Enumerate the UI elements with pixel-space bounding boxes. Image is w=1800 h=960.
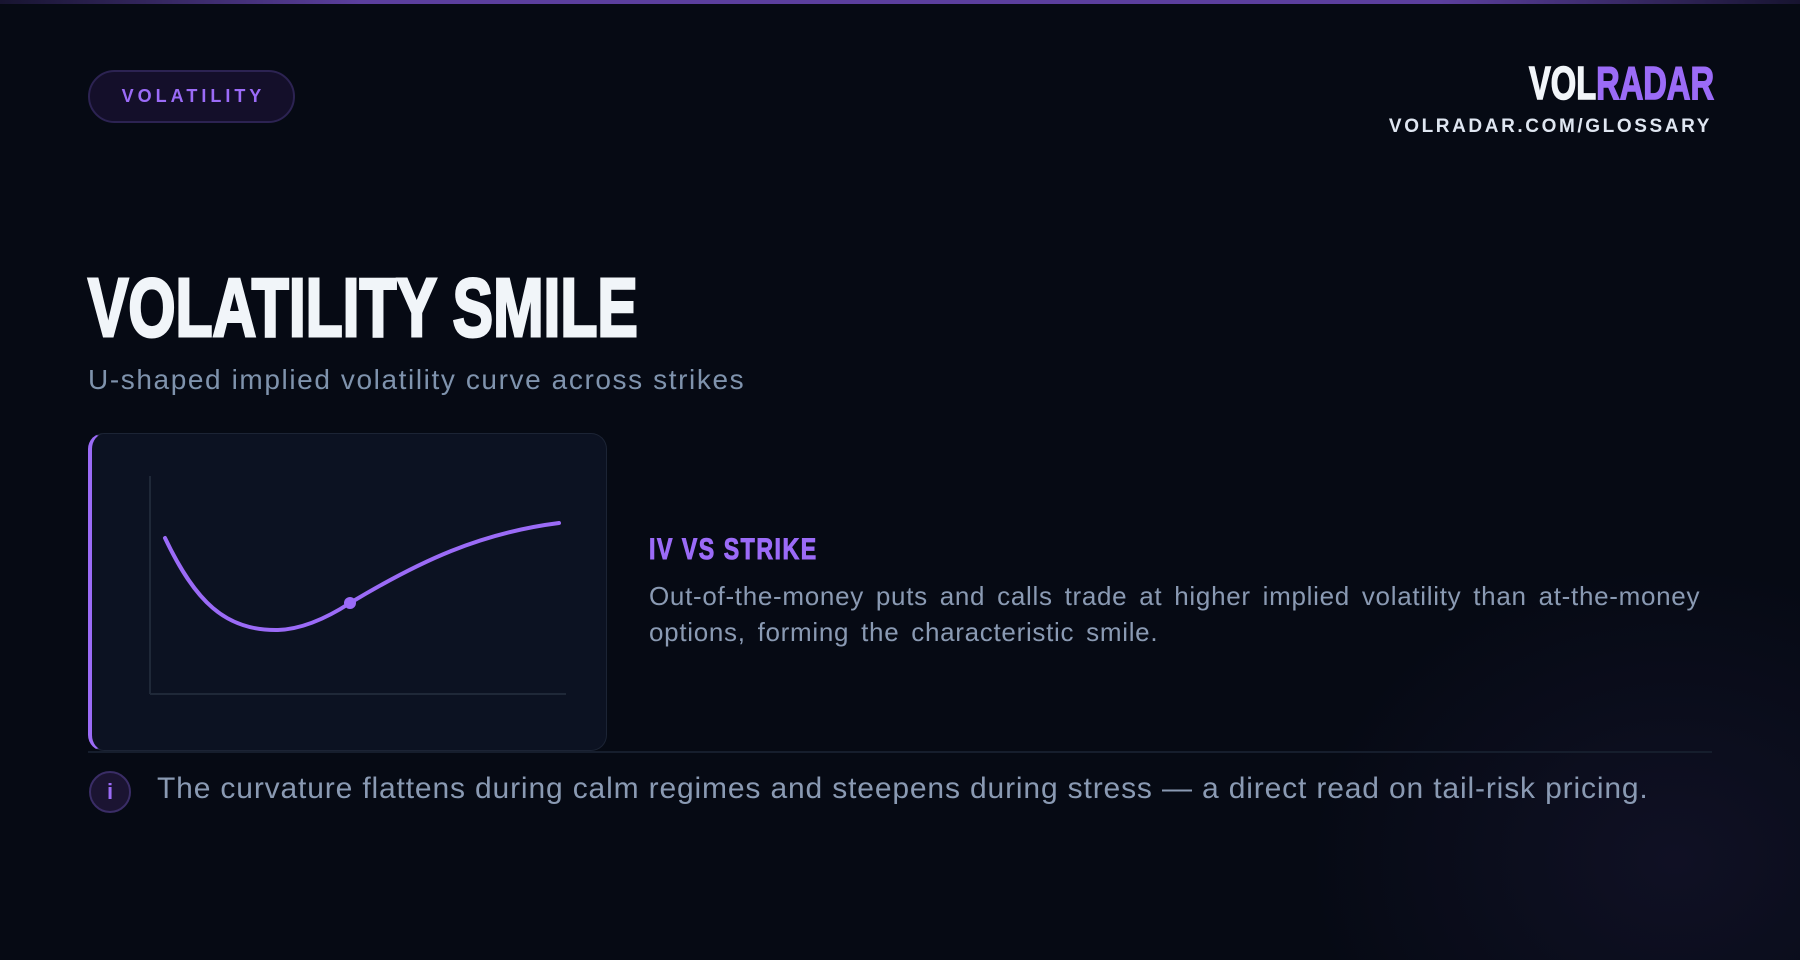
divider [88, 751, 1712, 753]
text block: explanation: options, forming the characteristic smile. [649, 617, 1158, 647]
logo: VOLRADAR [1529, 57, 1714, 109]
title: VOLATILITY SMILE [88, 261, 638, 354]
category pill: VOLATILITY [122, 86, 265, 106]
footnote: The curvature flattens during calm regimes and steepens during stress — a direct read on tail-risk pricing. [157, 772, 1649, 805]
panel: chart card [88, 433, 607, 751]
background glow [1300, 560, 1800, 960]
logo url: VOLRADAR.COM/GLOSSARY [1389, 116, 1712, 137]
text block: explanation [649, 581, 1700, 647]
top accent bar [0, 0, 1800, 4]
subtitle: U-shaped implied volatility curve across strikes [88, 364, 745, 395]
text block: explanation: Out-of-the-money puts and calls trade at higher implied volatility than at-the-money [649, 581, 1700, 611]
heading: IV vs strike: IV VS STRIKE [649, 533, 818, 566]
icon: info: i [107, 779, 113, 804]
chart: IV smile curve [149, 476, 566, 695]
icon: info [89, 771, 131, 813]
category pill [88, 70, 295, 123]
